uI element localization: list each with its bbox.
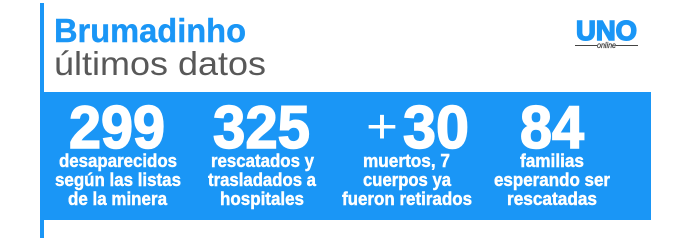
stat: 325 rescatados: 325 [213,94,310,161]
stat: +30 muertos: fueron retirados [342,189,472,209]
stat: +30 muertos: muertos, 7 [363,151,450,171]
stat: 325 rescatados [208,94,317,209]
logo: UNO online: UNO [576,15,637,46]
stat: 299 desaparecidos: desaparecidos [59,151,177,171]
stat: 84 familias [494,94,610,209]
stat: +30 muertos: 30 [403,94,469,161]
stat: +30 muertos [342,94,472,209]
stat: 299 desaparecidos: según las listas [55,170,181,190]
accent vertical bar [40,3,44,238]
stat: 84 familias: familias [520,151,584,171]
stat: 325 rescatados: trasladados a [208,170,317,190]
title: Brumadinho [54,12,246,49]
panel: statistics [40,92,651,220]
title: últimos datos [54,45,266,82]
stat: +30 muertos: cuerpos ya [363,170,452,190]
stat: 325 rescatados: hospitales [220,189,304,209]
stat: 299 desaparecidos: 299 [69,94,165,161]
stat: 84 familias: rescatadas [507,189,597,209]
stat: 299 desaparecidos [55,94,181,209]
stat: 84 familias: esperando ser [494,170,610,190]
stat: 299 desaparecidos: de la minera [68,189,168,209]
logo: UNO online: online [597,41,616,50]
title [54,12,266,82]
stat: 325 rescatados: rescatados y [211,151,314,171]
stat: 84 familias: 84 [520,94,585,161]
stat: +30 muertos: + [366,101,398,154]
